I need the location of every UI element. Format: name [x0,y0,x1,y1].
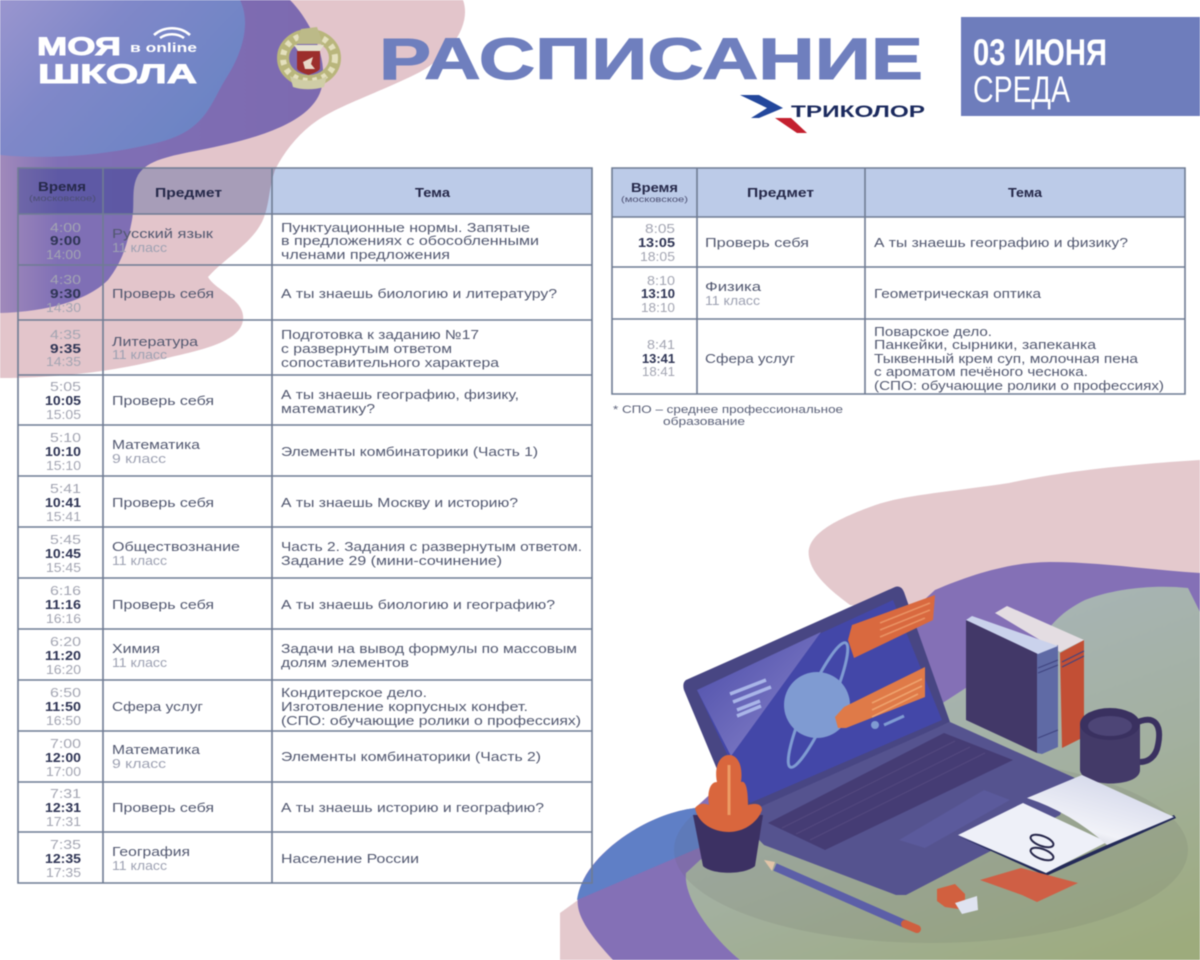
right row 3: Тыквенный крем суп, молочная пена [874,351,1139,366]
illustration: pencil [764,860,917,929]
illustration: plant [693,755,763,873]
mug body [1080,724,1140,784]
row 7: 15:45 [46,560,81,575]
logo: Моя школа в online [37,28,197,89]
row 12: 7:31 [50,786,81,801]
row 6: А ты знаешь Москву и историю? [281,495,518,510]
table header: right: (московское) [621,195,688,204]
row 2: 14:30 [46,300,81,315]
row 6: 10:41 [45,495,81,510]
mug handle [1138,720,1159,762]
right row 2: Геометрическая оптика [874,286,1042,301]
row 13: 11 класс [112,858,168,873]
row 4: 10:05 [45,393,81,408]
right row 1: Проверь себя [705,235,809,250]
footnote: * СПО – среднее профессиональное [613,404,843,416]
plant leaf vein [728,765,730,815]
logo: Моя школа в online: в online [130,40,197,55]
row 1: 9:00 [50,233,81,248]
background blob: bottom-right purple [578,562,1200,960]
chat bubble top [848,595,935,658]
background blob: blue segment [577,808,722,900]
table header: right: Предмет [747,186,814,200]
table header: right: Тема [1008,186,1043,200]
row 11 [45,736,541,779]
row 3 [46,327,500,370]
table header: left: Время [38,180,86,194]
row 8: Проверь себя [112,597,214,612]
row 3: 14:35 [46,354,81,369]
row 7: Часть 2. Задания с развернутым ответом. [281,539,582,554]
plant pot [693,815,763,873]
table grid: right [612,168,1185,394]
right row 3: 18:41 [642,364,675,379]
row 7: 10:45 [45,546,81,561]
row 10: 6:50 [50,685,81,700]
row 8: А ты знаешь биологию и географию? [281,597,555,612]
row 6 [45,481,518,524]
desk shadow ellipse [674,757,1188,943]
emblem crown [297,27,323,44]
row 2: 4:30 [50,272,81,287]
row 13: 12:35 [45,851,81,866]
notebook cover [958,815,1176,876]
right row 2: 13:10 [641,286,675,301]
row 6: 5:41 [50,481,81,496]
row 7 [45,532,582,575]
row 8: 6:16 [50,583,81,598]
table header: left: (московское) [29,194,96,203]
plant leaves [695,755,762,832]
logo: Моя школа в online: МОЯ [37,33,121,61]
row 10: (СПО: обучающие ролики о профессиях) [281,713,581,728]
table header: right: Время [631,181,678,195]
row 11: 12:00 [45,750,81,765]
right row 1: 13:05 [638,235,675,250]
row 2: Проверь себя [112,286,214,301]
right row 3 [642,324,1164,393]
table header: left: Тема [415,186,451,200]
screen label [884,716,904,725]
background blob: top-left blue [0,0,245,157]
row 12: 17:31 [46,814,81,829]
screen planet [784,672,850,738]
row 9: долям элементов [281,655,409,670]
background blob: top-left purple [0,0,323,313]
row 3: 4:35 [50,327,81,342]
illustration: books [966,606,1084,754]
row 1: 11 класс [112,240,168,255]
illustration: red cards [980,868,1078,902]
right row 2: 11 класс [705,293,761,308]
table: left schedule [18,168,592,883]
row 6: 15:41 [46,509,81,524]
logo: Триколор [740,95,925,133]
logo: Триколор: ТРИКОЛОР [791,102,925,121]
right row 2 [641,273,1042,315]
red book pages [995,606,1084,652]
illustration: eraser [937,884,978,914]
screen dot [871,721,879,729]
date box: СРЕДА [973,69,1070,110]
row 1: Пунктуационные нормы. Запятые [281,220,530,235]
blue book cover [966,620,1037,753]
right row 3: 13:41 [642,351,675,366]
row 12 [45,786,544,829]
row 5: 15:10 [46,458,81,473]
laptop screen bezel [683,587,950,815]
row 4: 15:05 [46,407,81,422]
illustration: mug [1080,708,1159,784]
row 10 [45,685,581,728]
title: РАСПИСАНИЕ [379,27,923,92]
row 5 [45,430,538,473]
paper clips [1029,832,1055,863]
table grid: left [18,168,592,883]
red book [1060,640,1084,748]
row 13: Население России [281,851,419,866]
keyboard key rows [782,741,985,840]
row 4: Проверь себя [112,393,214,408]
row 11: 9 класс [112,756,167,771]
row 8 [45,583,555,626]
row 2: 9:30 [50,286,81,301]
row 8: 16:16 [46,611,81,626]
background blob: bottom-left pink corner [560,900,620,960]
planet ring [779,638,857,772]
row 5: Элементы комбинаторики (Часть 1) [281,444,538,459]
row 11: 17:00 [46,764,81,779]
row 12: 12:31 [45,800,81,815]
row 13: 7:35 [50,837,81,852]
right row 3: с ароматом печёного чеснока. [874,364,1088,379]
right row 3: (СПО: обучающие ролики о профессиях) [874,378,1164,393]
row 9 [45,634,577,677]
background blob: bottom-right pink [809,460,1200,640]
mug top [1080,708,1140,740]
table: right schedule [612,168,1185,394]
row 10: Сфера услуг [112,699,203,714]
row 2: А ты знаешь биологию и литературу? [281,286,557,301]
row 13 [45,837,419,880]
footnote: образование [663,416,745,428]
icon: emblem of the Ministry [283,27,335,89]
date box [961,17,1200,116]
right row 2: 8:10 [647,273,675,288]
right page [1027,775,1174,845]
left page [958,803,1107,873]
right row 3: 8:41 [647,337,675,352]
row 3: Подготовка к заданию №17 [281,327,479,342]
table header: left [18,168,592,214]
row 1: 4:00 [50,220,81,235]
right row 3: Сфера услуг [705,351,795,366]
row 1 [46,220,539,262]
laptop keyboard [768,733,1013,850]
screen text lines [730,680,771,716]
logo: Моя школа в online: ШКОЛА [38,59,197,89]
chat bubble bottom [835,667,925,728]
illustration: open notebook [958,775,1176,876]
row 1: в предложениях с обособленными [281,233,539,248]
row 9: Задачи на вывод формулы по массовым [281,641,577,656]
row 5: 5:10 [50,430,81,445]
emblem ribbon [290,76,327,89]
row 5: Математика [112,437,201,452]
row 10: 11:50 [45,699,81,714]
row 12: А ты знаешь историю и географию? [281,800,544,815]
right row 2: 18:10 [641,300,675,315]
blue book spine [1037,645,1058,754]
right row 3: Поварское дело. [874,324,992,339]
background blob: top-left pink [0,0,465,378]
right row 1: 8:05 [645,221,675,236]
row 3: с развернутым ответом [281,341,452,356]
row 13: География [112,844,190,859]
right row 3: Панкейки, сырники, запеканка [874,337,1097,352]
laptop base [735,722,1075,895]
background blob: green desk [686,587,1200,960]
row 7: Задание 29 (мини-сочинение) [281,553,502,568]
row 5: 10:10 [45,444,81,459]
row 4: А ты знаешь географию, физику, [281,387,519,402]
row 12: Проверь себя [112,800,214,815]
row 9: Химия [112,641,160,656]
row 5: 9 класс [112,451,167,466]
row 9: 11 класс [112,655,168,670]
row 4: 5:05 [50,379,81,394]
footnote [613,404,843,428]
screen light wedge [697,632,821,756]
right row 2: Физика [705,279,762,294]
right row 1: 18:05 [640,249,675,264]
row 10: 16:50 [46,713,81,728]
chat bubble top lines [880,603,930,637]
illustration: laptop [683,587,1075,895]
row 7: 5:45 [50,532,81,547]
table header: left: Предмет [155,186,222,200]
row 4 [45,379,519,422]
row 3: 11 класс [112,347,168,362]
row 4: математику? [281,401,375,416]
row 1: членами предложения [281,247,450,262]
row 2 [46,272,557,315]
date box: 03 ИЮНЯ [973,32,1107,73]
row 7: Обществознание [112,539,240,554]
row 11: Элементы комбинаторики (Часть 2) [281,749,541,764]
emblem shield [297,51,320,75]
row 1: 14:00 [46,247,81,262]
right row 1 [638,221,1128,264]
row 9: 16:20 [46,662,81,677]
row 1: Русский язык [112,226,213,241]
row 10: Кондитерское дело. [281,685,427,700]
emblem wreath [283,35,335,81]
right row 1: А ты знаешь географию и физику? [874,235,1128,250]
laptop screen [697,600,942,803]
row 11: Математика [112,742,201,757]
row 8: 11:16 [45,597,81,612]
row 3: сопоставительного характера [281,355,500,370]
row 6: Проверь себя [112,495,214,510]
row 10: Изготовление корпусных конфет. [281,699,528,714]
book spine stripes [1038,651,1084,738]
row 9: 6:20 [50,634,81,649]
row 7: 11 класс [112,553,168,568]
row 11: 7:00 [50,736,81,751]
table header: right [612,168,1185,217]
blue book pages [966,616,1058,654]
row 13: 17:35 [46,865,81,880]
row 3: Литература [112,334,199,349]
row 9: 11:20 [45,648,81,663]
row 3: 9:35 [50,341,81,356]
chat bubble bottom lines [872,679,922,717]
laptop touchpad [899,790,1010,848]
